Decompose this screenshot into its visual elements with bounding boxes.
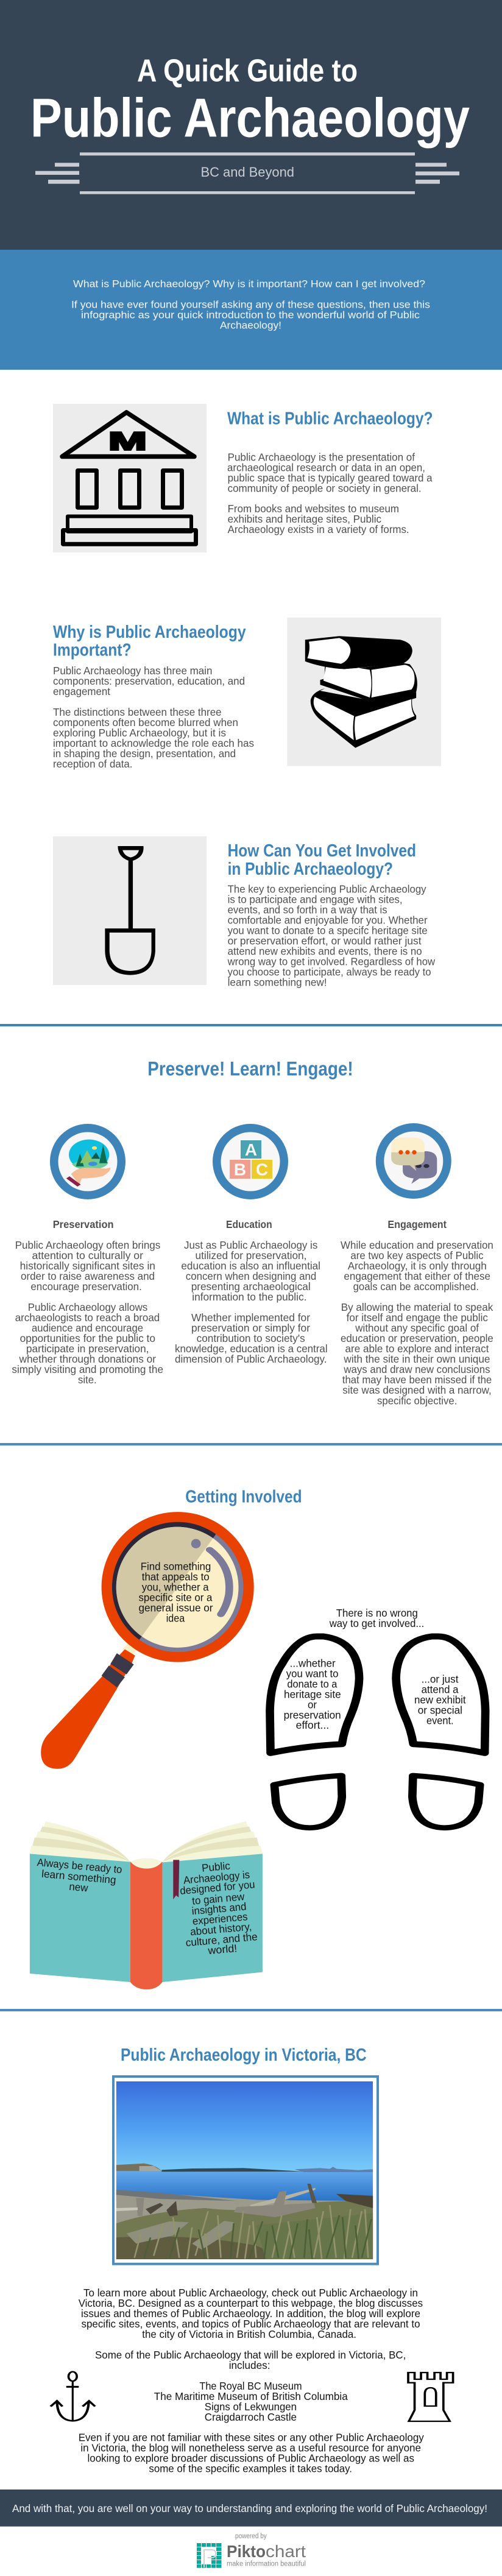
column: engagement: that may have been missed if the — [342, 1374, 492, 1386]
column: engagement: engagement that either of these — [344, 1270, 490, 1282]
callout: attend — [414, 1673, 466, 1726]
callout: attend: event. — [426, 1714, 454, 1726]
column: engagement: for itself and engage the public — [347, 1311, 488, 1324]
callout: donate: ...whether — [290, 1657, 336, 1669]
body text: comfortable and enjoyable for you. Whether — [228, 914, 428, 926]
column: preservation: whether through donations or — [19, 1353, 156, 1365]
column: education: Education — [226, 1218, 272, 1230]
column: engagement: site was designed with a narrow, — [342, 1384, 492, 1396]
body text: learn something new! — [228, 976, 327, 989]
subtitle ribbon: BC and Beyond — [201, 164, 294, 180]
body text: important to acknowledge the role each has — [53, 737, 254, 749]
icon: education blocks: C — [256, 1160, 268, 1179]
list: victoria sites — [154, 2380, 348, 2423]
body text: The distinctions between these three — [53, 706, 222, 718]
list: victoria sites: The Royal BC Museum — [199, 2380, 302, 2392]
panel: getting involved — [30, 1487, 486, 1989]
icon: preservation — [50, 1124, 125, 1199]
column: engagement: specific objective. — [377, 1395, 457, 1407]
icon: castle tower — [408, 2373, 453, 2421]
column: education: education is also an influential — [181, 1260, 320, 1272]
text: right page: world! — [207, 1942, 238, 1957]
text: left page — [37, 1856, 122, 1894]
body text: components often become blurred when — [53, 716, 238, 729]
body text: you want to donate to a specifc heritage site — [228, 925, 428, 937]
body text: The key to experiencing Public Archaeology — [228, 883, 426, 895]
callout: find something — [139, 1561, 213, 1624]
text: right page: Public — [201, 1860, 231, 1874]
callout: find something: general issue or — [139, 1602, 213, 1614]
text: blog description — [79, 2287, 423, 2371]
column: education: dimension of Public Archaeology. — [175, 1353, 327, 1365]
icon: shovel — [53, 836, 207, 985]
column: preservation: audience and encourage — [32, 1322, 143, 1334]
column: preservation: participate in preservation, — [26, 1343, 149, 1355]
intro panel: What is Public Archaeology? Why is it important? How can I get involved? — [73, 278, 425, 289]
body text: is to participate and engage with sites, — [228, 894, 403, 906]
column: preservation: Preservation — [53, 1218, 114, 1230]
text: left page: new — [69, 1880, 89, 1894]
callout: attend: ...or just — [422, 1673, 459, 1685]
icon: open book — [30, 1821, 263, 1989]
body text — [227, 883, 435, 989]
callout: donate: or — [308, 1698, 317, 1710]
heading: Important? — [53, 641, 132, 660]
footer banner: And with that, you are well on your way to understanding and exploring the world of Public Archaeology! — [12, 2502, 487, 2514]
body text: Public Archaeology is the presentation of — [228, 451, 415, 463]
intro panel: Archaeology! — [220, 319, 281, 331]
body text: in shaping the design, presentation, and — [53, 747, 236, 760]
callout: donate: donate to a — [287, 1678, 338, 1690]
column: education: Whether implemented for — [191, 1311, 310, 1324]
body text: you choose to participate, always be ready to — [228, 966, 431, 978]
body text — [53, 665, 254, 770]
column: education: Just as Public Archaeology is — [184, 1239, 318, 1251]
text: right page: insights and — [191, 1900, 247, 1917]
text: closing note — [79, 2432, 424, 2475]
body text: events, and so forth in a way that is — [228, 904, 387, 916]
column: preservation: site. — [78, 1374, 97, 1386]
column: preservation: Public Archaeology allows — [28, 1301, 148, 1313]
column: education: preservation or simply for — [191, 1322, 310, 1334]
icon: education blocks: B — [234, 1160, 246, 1179]
column: engagement: are able to explore and interact — [345, 1343, 489, 1355]
text: closing note: Even if you are not familiar with these sites or any other Public Archaeology — [79, 2432, 424, 2444]
icon: museum — [53, 404, 207, 552]
icon: education blocks: A — [245, 1140, 257, 1159]
column: education: concern when designing and — [186, 1270, 316, 1282]
body text: or preservation effort, or would rather just — [228, 935, 422, 947]
callout: find something: that appeals to — [142, 1570, 210, 1583]
text: blog description: includes: — [229, 2359, 270, 2371]
piktochart logo — [197, 2533, 306, 2568]
intro panel: infographic as your quick introduction to the wonderful world of Public — [81, 309, 420, 320]
column: education: knowledge, education is a central — [175, 1343, 328, 1355]
callout: find something: Find something — [141, 1561, 211, 1573]
intro panel — [0, 250, 502, 370]
column: engagement: By allowing the material to speak — [341, 1301, 493, 1313]
column: engagement: are two key aspects of Public — [350, 1249, 484, 1262]
icon: stack of books — [287, 618, 441, 766]
list: victoria sites: The Maritime Museum of British Columbia — [154, 2390, 348, 2402]
icon: anchor — [51, 2372, 95, 2421]
column: preservation: historically significant sites in — [20, 1260, 155, 1272]
icon: engagement speech bubbles — [376, 1123, 451, 1199]
body text: engagement — [53, 685, 110, 697]
callout: donate: you want to — [286, 1667, 339, 1679]
panel: why is public archaeology important — [53, 618, 441, 770]
heading: Preserve! Learn! Engage! — [147, 1058, 353, 1080]
icon: education blocks — [213, 1124, 288, 1199]
column: preservation: attention to culturally or — [32, 1249, 143, 1262]
panel: how can you get involved — [53, 836, 435, 989]
body text: components: preservation, education, and — [53, 675, 245, 687]
body text: community of people or society in general. — [228, 482, 422, 494]
callout: attend: attend a — [422, 1683, 459, 1695]
column: engagement: Engagement — [387, 1218, 447, 1230]
text: blog description: specific sites, events, and topics of Public Archaeology that are relevant to — [82, 2318, 420, 2330]
column: education — [175, 1218, 328, 1365]
body text: exploring Public Archaeology, but it is — [53, 727, 226, 739]
column: education: utilized for preservation, — [195, 1249, 306, 1262]
text: right page: designed for you — [180, 1878, 255, 1897]
icon: magnifying glass — [41, 1512, 254, 1769]
callout: donate: preservation — [284, 1709, 341, 1721]
text: blog description: Victoria, BC. Designed as a counterpart to this webpage, the blog discusses — [79, 2297, 423, 2309]
heading: Why is Public Archaeology — [53, 623, 246, 642]
callout: attend: or special — [418, 1704, 462, 1716]
body text: archaeological research or data in an open, — [227, 461, 425, 473]
column: preservation: order to raise awareness and — [21, 1270, 155, 1282]
list: victoria sites: Signs of Lekwungen — [205, 2401, 297, 2413]
heading: in Public Archaeology? — [228, 859, 393, 879]
column: preservation: archaeologists to reach a broad — [15, 1311, 160, 1324]
column: engagement: with the site in their own unique — [343, 1353, 490, 1365]
heading — [228, 841, 416, 879]
body text — [227, 451, 433, 535]
body text: Public Archaeology has three main — [53, 665, 212, 677]
body text: Archaeology exists in a variety of forms. — [228, 523, 409, 535]
column: preservation: opportunities for the public to — [20, 1332, 155, 1344]
text: closing note: in Victoria, the blog will nonetheless serve as a useful resource for anyone — [80, 2442, 421, 2454]
column: engagement: ways and draw new conclusions — [343, 1363, 490, 1375]
text: closing note: looking to explore broader discussions of Public Archaeology as well as — [88, 2452, 414, 2465]
text: right page: Archaeology is — [183, 1868, 250, 1886]
text: blog description: issues and themes of Public Archaeology. In addition, the blog will explore — [81, 2307, 420, 2320]
text: right page: experiences — [192, 1910, 249, 1927]
list: victoria sites: Craigdarroch Castle — [205, 2411, 297, 2423]
column: education: contribution to society's — [197, 1332, 305, 1344]
callout: no wrong way — [329, 1607, 424, 1629]
column: preservation: simply visiting and promoting the — [12, 1363, 163, 1375]
text: right page: about history, — [189, 1921, 252, 1938]
heading: Getting Involved — [185, 1487, 302, 1507]
heading: How Can You Get Involved — [228, 841, 416, 861]
text: right page: culture, and the — [185, 1930, 258, 1949]
callout: donate: heritage site — [284, 1688, 341, 1700]
heading: What is Public Archaeology? — [227, 409, 433, 429]
heading: Public Archaeology in Victoria, BC — [121, 2045, 367, 2065]
text: closing note: some of the specific examples it takes today. — [149, 2463, 352, 2475]
text: blog description: the city of Victoria in British Columbia, Canada. — [142, 2328, 356, 2340]
photo: beach with driftwood — [116, 2081, 373, 2259]
body text: reception of data. — [53, 758, 133, 770]
column: education: information to the public. — [192, 1291, 306, 1303]
text: blog description: To learn more about Public Archaeology, check out Public Archaeology in — [83, 2287, 418, 2299]
column: preservation: encourage preservation. — [30, 1280, 142, 1293]
piktochart logo: chart — [266, 2542, 306, 2561]
intro panel: If you have ever found yourself asking any of these questions, then use this — [71, 298, 430, 310]
column: engagement: While education and preservation — [341, 1239, 493, 1251]
callout: find something: specific site or a — [139, 1591, 213, 1603]
body text: public space that is typically geared toward a — [228, 471, 433, 484]
callout: no wrong way: way to get involved... — [329, 1617, 424, 1629]
column: education: presenting archaeological — [191, 1280, 311, 1293]
panel: public archaeology in victoria — [51, 2045, 453, 2475]
piktochart logo: powered by — [235, 2533, 267, 2540]
callout: find something: idea — [166, 1612, 185, 1624]
piktochart logo: Pikto — [227, 2542, 266, 2561]
subtitle ribbon — [35, 152, 459, 194]
icon: footprint soles — [270, 1637, 486, 1828]
text: right page — [180, 1860, 258, 1957]
column: engagement: education or preservation, people — [341, 1332, 493, 1344]
heading — [53, 623, 246, 660]
panel: what is public archaeology — [53, 404, 433, 552]
title line 1: A Quick Guide to — [137, 54, 358, 89]
body text: exhibits and heritage sites, Public — [228, 513, 381, 525]
callout: no wrong way: There is no wrong — [336, 1607, 418, 1619]
column: engagement: Archaeology, it is only through — [348, 1260, 487, 1272]
text: blog description: Some of the Public Archaeology that will be explored in Victoria, BC, — [95, 2349, 406, 2361]
footer banner — [0, 2490, 502, 2527]
text: right page: to gain new — [191, 1890, 245, 1907]
body text: attend new exhibits and events, there is no — [228, 945, 422, 958]
callout: donate: effort... — [296, 1719, 329, 1731]
body text: wrong way to get involved. Regardless of how — [227, 956, 435, 968]
column: preservation — [12, 1218, 163, 1386]
body text: From books and websites to museum — [228, 503, 399, 515]
text: left page: learn something — [41, 1868, 116, 1886]
callout: find something: you, whether a — [142, 1581, 209, 1593]
piktochart logo: make information beautiful — [227, 2561, 306, 2568]
icon: museum: M — [108, 427, 147, 456]
icon: piktochart mark — [197, 2543, 222, 2568]
column: engagement: without any specific goal of — [355, 1322, 479, 1334]
column: engagement: goals can be accomplished. — [353, 1280, 479, 1293]
callout: donate — [284, 1657, 341, 1731]
callout: attend: new exhibit — [414, 1693, 466, 1706]
column: engagement — [341, 1218, 493, 1407]
photo frame — [113, 2077, 378, 2264]
column: preservation: Public Archaeology often brings — [15, 1239, 161, 1251]
text: left page: Always be ready to — [37, 1856, 122, 1876]
header panel — [0, 0, 502, 250]
panel: preserve learn engage — [12, 1058, 493, 1407]
